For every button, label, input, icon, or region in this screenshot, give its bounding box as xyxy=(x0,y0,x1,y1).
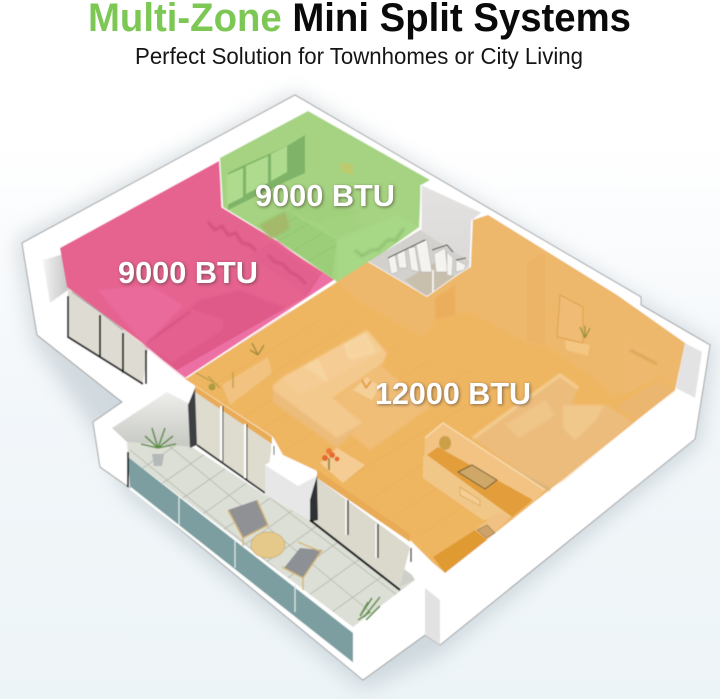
pink floor xyxy=(145,290,290,378)
pink room edges xyxy=(220,159,277,240)
balcony tiled floor xyxy=(127,442,415,627)
patio chair two xyxy=(282,542,322,590)
label: pink zone: 9000 BTU xyxy=(118,255,258,290)
right sliding doors xyxy=(310,475,411,590)
door and far wardrobe xyxy=(616,335,675,420)
low wall xyxy=(310,505,415,587)
apartment cutaway xyxy=(22,95,710,680)
subtitle: Perfect Solution for Townhomes or City Living xyxy=(135,43,583,69)
coffee table xyxy=(353,377,380,400)
side table with flowers xyxy=(320,448,365,483)
pink floor strip xyxy=(177,272,335,378)
label: green zone: 9000 BTU xyxy=(255,178,395,213)
green room: 9000 BTU xyxy=(220,111,430,282)
back walls xyxy=(337,215,685,397)
bed xyxy=(97,285,224,362)
kitchen island xyxy=(423,423,545,520)
walk-in closet xyxy=(368,185,482,297)
rug xyxy=(333,365,430,450)
pink and orange divider xyxy=(186,280,335,378)
balcony side wall xyxy=(112,392,192,447)
bedroom windows xyxy=(68,287,148,384)
hanging clothes xyxy=(388,240,466,276)
left wall recess xyxy=(43,253,68,303)
console with plants xyxy=(196,343,272,405)
patio chair one xyxy=(228,500,268,546)
potted plant left xyxy=(141,428,176,466)
potted plant right xyxy=(358,597,380,620)
green window xyxy=(227,135,305,210)
bathroom xyxy=(473,375,633,490)
pink room: 9000 BTU xyxy=(60,159,335,378)
L-shaped sofa xyxy=(273,330,387,448)
left sliding doors xyxy=(188,388,274,493)
green bed xyxy=(285,196,360,237)
interior wall shadow at bottom corner xyxy=(425,588,440,645)
central column xyxy=(265,455,315,520)
label: orange zone: 12000 BTU xyxy=(375,376,531,411)
lower counter and sink xyxy=(433,511,510,573)
round patio table xyxy=(251,532,285,558)
pink wardrobe xyxy=(200,207,323,297)
green sign xyxy=(340,162,353,175)
mirror and console xyxy=(557,295,590,356)
orange ledge over doors xyxy=(195,386,410,542)
wood planks xyxy=(190,320,570,535)
balcony xyxy=(112,388,415,664)
green bench xyxy=(260,212,290,240)
orange room: 12000 BTU xyxy=(185,215,685,573)
glass railing xyxy=(128,452,353,664)
white outer walls xyxy=(22,95,710,680)
green floor xyxy=(257,210,337,277)
far right closet recess xyxy=(676,343,702,398)
green wardrobe xyxy=(337,215,418,282)
